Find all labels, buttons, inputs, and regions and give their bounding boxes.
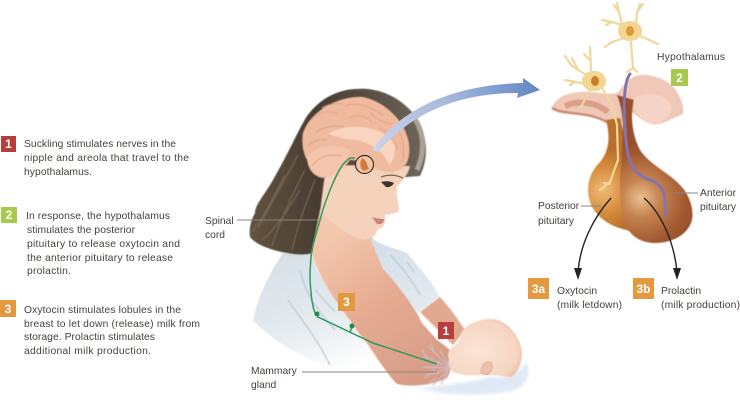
step 2 description: stimulates the posterior bbox=[27, 225, 136, 236]
step 2 description: In response, the hypothalamus bbox=[26, 211, 170, 222]
badge 1 bbox=[1, 136, 16, 152]
nerve pathway bbox=[310, 158, 437, 364]
posterior pituitary bbox=[588, 118, 640, 231]
shirt bbox=[253, 253, 392, 384]
face bbox=[320, 165, 410, 240]
anterior pituitary label: pituitary bbox=[700, 202, 737, 213]
badge 3: 3 bbox=[5, 302, 12, 316]
oxytocin output: Oxytocin bbox=[557, 286, 597, 297]
baby head bbox=[448, 319, 522, 377]
badge 2 on diagram bbox=[671, 69, 688, 86]
brain bbox=[302, 97, 409, 178]
mammary gland label bbox=[251, 366, 437, 391]
step 2 description: the anterior pituitary to release bbox=[27, 253, 173, 264]
step 3 description: breast to let down (release) milk from bbox=[24, 319, 200, 330]
purple axon bbox=[624, 74, 666, 216]
blanket bbox=[420, 362, 529, 394]
arrow to prolactin bbox=[644, 198, 681, 280]
posterior pituitary label: Posterior bbox=[538, 201, 580, 212]
badge 2 bbox=[1, 207, 17, 223]
step 2 text bbox=[1, 207, 180, 277]
arrow to oxytocin bbox=[574, 198, 611, 280]
lips bbox=[372, 217, 384, 224]
upper neuron bbox=[602, 3, 658, 72]
step 3 description: Oxytocin stimulates lobules in the bbox=[24, 305, 181, 316]
badge 3 on body: 3 bbox=[343, 295, 350, 309]
hypothalamus tissue bbox=[552, 75, 683, 125]
pink lobe bbox=[634, 94, 672, 123]
mammary gland label: gland bbox=[251, 380, 276, 391]
oxytocin output bbox=[528, 278, 622, 311]
mammary gland label: Mammary bbox=[251, 366, 298, 377]
hypothalamus label: Hypothalamus bbox=[657, 52, 725, 63]
posterior pituitary label: pituitary bbox=[538, 216, 575, 227]
oxytocin output: (milk letdown) bbox=[557, 300, 622, 311]
badge 3 bbox=[0, 300, 16, 317]
step 2 description: pituitary to release oxytocin and bbox=[27, 239, 180, 250]
badge 2: 2 bbox=[6, 208, 13, 222]
step 1 description: nipple and areola that travel to the bbox=[24, 153, 189, 164]
illustration: mother breastfeeding bbox=[250, 89, 529, 394]
hypothalamus circle bbox=[356, 156, 374, 174]
spinal cord label: Spinal bbox=[205, 216, 234, 227]
anterior pituitary label bbox=[673, 188, 737, 213]
step 3 text bbox=[0, 300, 200, 357]
skin: neck, chest and breast bbox=[312, 210, 452, 386]
step 1 description: hypothalamus. bbox=[24, 167, 92, 178]
step 1 text bbox=[1, 136, 189, 178]
anterior pituitary label: Anterior bbox=[700, 188, 737, 199]
prolactin output: Prolactin bbox=[661, 286, 701, 297]
step 3 description: storage. Prolactin stimulates bbox=[24, 332, 155, 343]
spinal cord label bbox=[205, 216, 318, 241]
step 2 description: prolactin. bbox=[27, 266, 71, 277]
posterior pituitary label bbox=[538, 201, 602, 227]
baby ear bbox=[481, 362, 492, 375]
badge 1: 1 bbox=[5, 137, 12, 151]
right sleeve bbox=[370, 237, 440, 313]
pituitary illustration bbox=[552, 3, 692, 243]
prolactin output bbox=[633, 278, 740, 311]
badge 3a: 3a bbox=[532, 282, 545, 296]
badge 1 on body: 1 bbox=[443, 324, 450, 338]
anterior pituitary bbox=[617, 95, 692, 243]
lower neuron bbox=[565, 47, 618, 190]
eye and brow bbox=[381, 175, 403, 187]
spinal cord label: cord bbox=[205, 230, 225, 241]
badge 1 on body bbox=[438, 322, 454, 339]
mammary gland bbox=[422, 343, 450, 385]
badge 2 on diagram: 2 bbox=[676, 71, 683, 85]
prolactin output: (milk production) bbox=[661, 300, 740, 311]
step 3 description: additional milk production. bbox=[24, 346, 151, 357]
forearm bbox=[420, 297, 465, 345]
step 1 description: Suckling stimulates nerves in the bbox=[24, 139, 176, 150]
curved blue arrow bbox=[372, 78, 540, 152]
badge 3b: 3b bbox=[636, 282, 651, 296]
badge 3 on body bbox=[338, 293, 355, 311]
hair bbox=[250, 89, 426, 254]
